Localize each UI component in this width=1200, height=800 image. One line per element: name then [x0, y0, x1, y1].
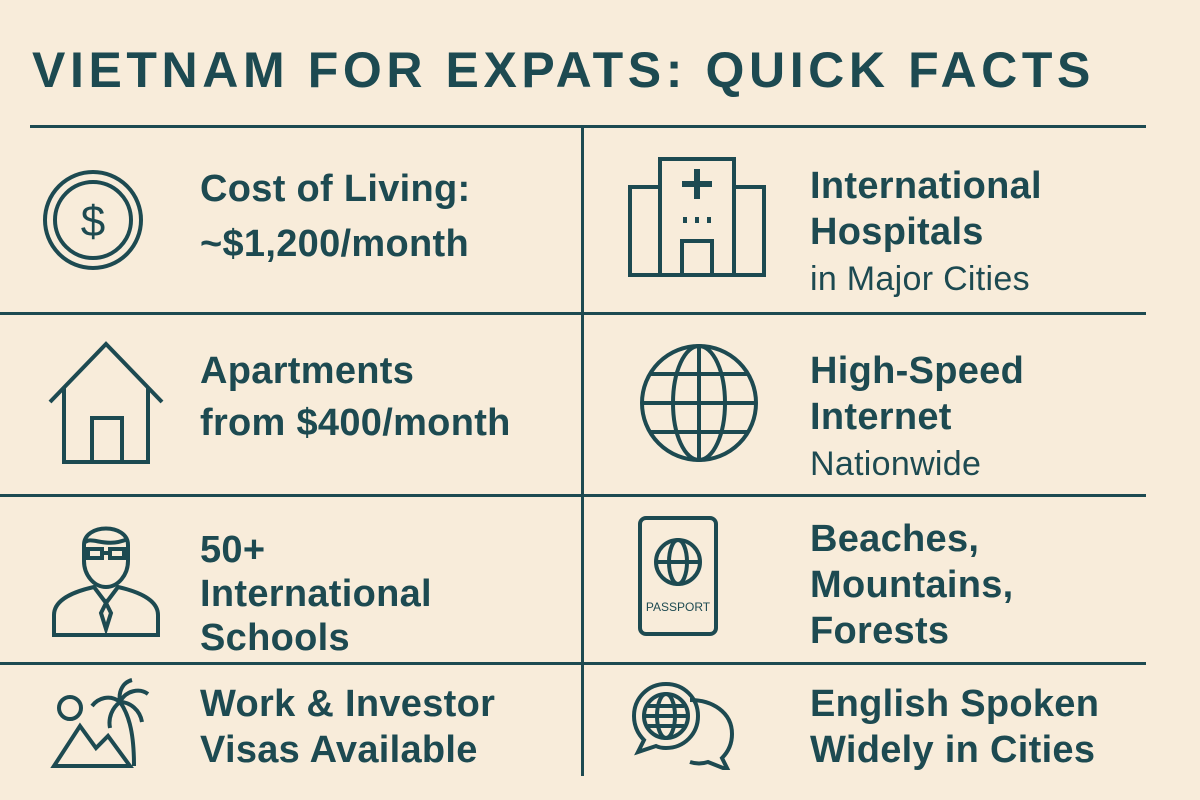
text: hospitals: International: [810, 165, 1042, 207]
icon: passport: [638, 516, 718, 636]
text: english: Widely in Cities: [810, 729, 1095, 771]
text: visas: [200, 683, 495, 771]
text: landscapes: Beaches,: [810, 518, 979, 560]
text: apartments: [200, 350, 511, 444]
text: schools: Schools: [200, 617, 350, 659]
icon: passport: PASSPORT: [646, 600, 711, 614]
icon: house: [48, 341, 164, 464]
text: landscapes: [810, 518, 1014, 652]
text: schools: [200, 529, 432, 659]
icon: speech bubbles: [632, 682, 734, 770]
text: apartments: Apartments: [200, 350, 414, 392]
text: schools: 50+: [200, 529, 265, 571]
text: cost of living: Cost of Living:: [200, 168, 470, 210]
icon: hospital: [628, 157, 766, 277]
title: VIETNAM FOR EXPATS: QUICK FACTS: [32, 42, 1095, 98]
text: internet: [810, 350, 1024, 483]
icon: globe: [640, 344, 758, 462]
icon: coin: $: [81, 197, 105, 246]
text: english: English Spoken: [810, 683, 1099, 725]
text: hospitals: [810, 165, 1042, 298]
text: internet: Internet: [810, 396, 952, 438]
text: hospitals: in Major Cities: [810, 260, 1030, 298]
icon: coin: [43, 170, 143, 270]
text: internet: Nationwide: [810, 445, 981, 483]
text: landscapes: Mountains,: [810, 564, 1014, 606]
icon: island: [50, 678, 150, 768]
text: visas: Visas Available: [200, 729, 478, 771]
icon: person: [52, 526, 160, 637]
text: schools: International: [200, 573, 432, 615]
text: cost of living: ~$1,200/month: [200, 223, 469, 265]
text: cost of living: [200, 168, 470, 265]
text: landscapes: Forests: [810, 610, 949, 652]
text: apartments: from $400/month: [200, 402, 511, 444]
text: visas: Work & Investor: [200, 683, 495, 725]
text: internet: High-Speed: [810, 350, 1024, 392]
text: hospitals: Hospitals: [810, 211, 984, 253]
text: english: [810, 683, 1099, 771]
